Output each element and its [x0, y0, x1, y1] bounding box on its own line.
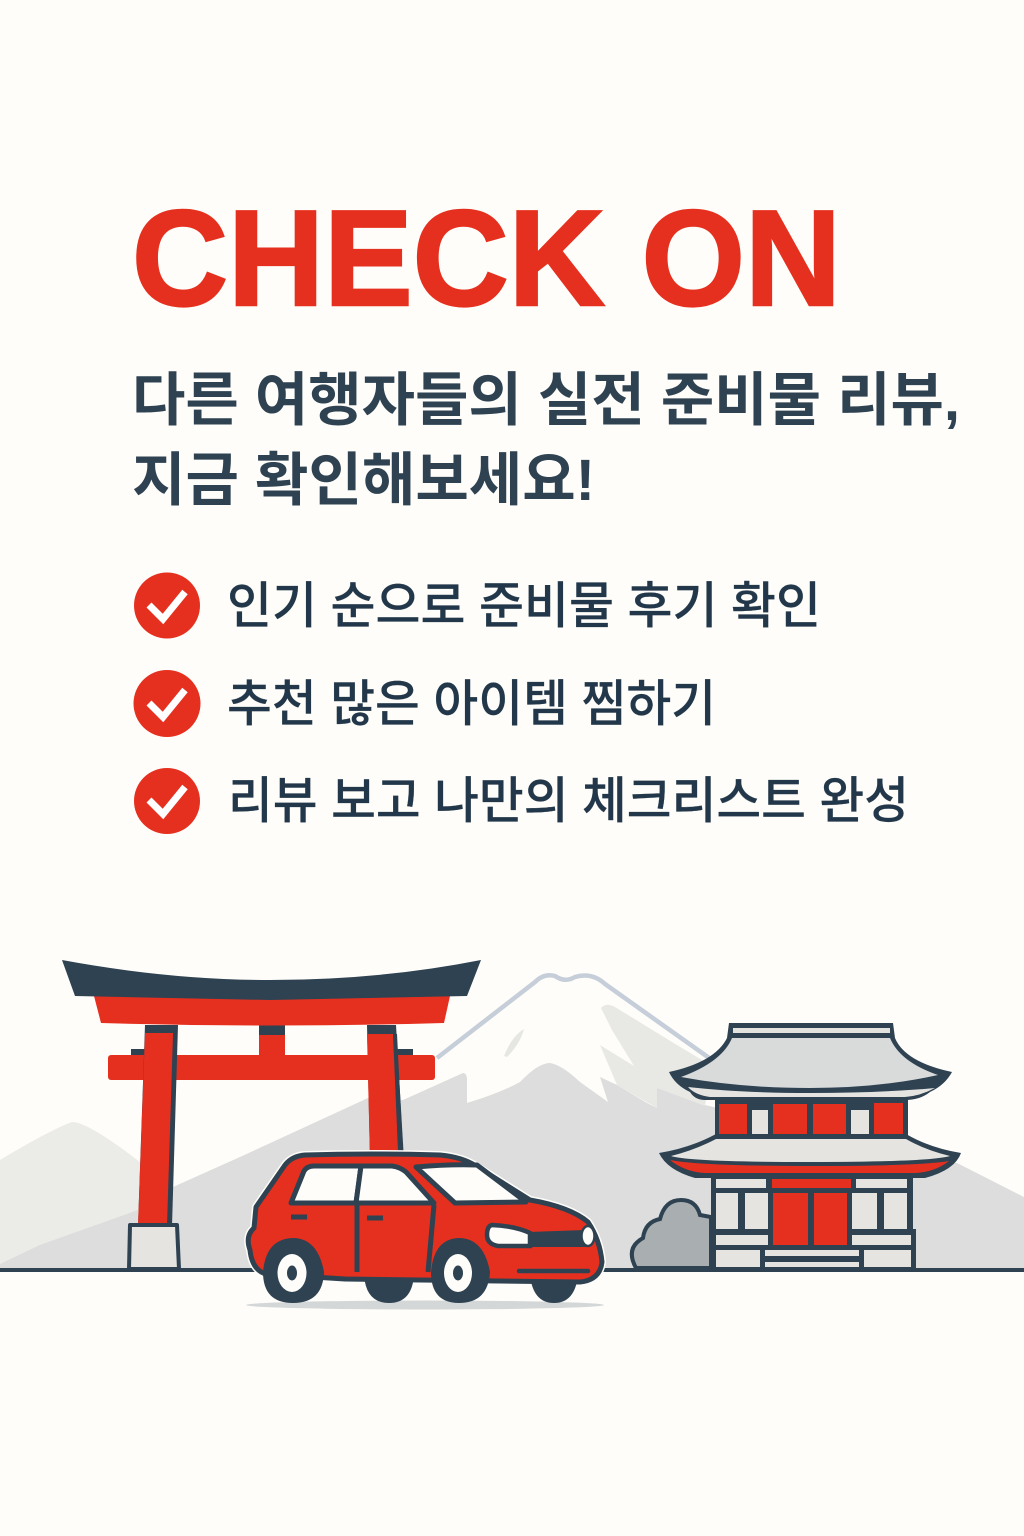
checklist — [134, 572, 909, 834]
main mountain — [0, 1063, 1024, 1270]
car side light — [582, 1226, 594, 1246]
car door handles — [291, 1217, 383, 1218]
car windows — [291, 1165, 526, 1203]
icon: red car — [248, 1154, 602, 1303]
left distant mountain — [0, 1122, 140, 1264]
car door lines — [357, 1203, 434, 1272]
title: CHECK ON — [132, 182, 841, 334]
car grille — [528, 1230, 586, 1247]
ground line — [0, 1268, 1024, 1272]
subtitle heading — [132, 368, 960, 513]
illustration: mountains — [0, 975, 1024, 1270]
front wheel — [431, 1238, 490, 1303]
torii right pillar overlay on beam — [393, 1034, 403, 1152]
torii right pillar — [367, 1025, 404, 1160]
torii end nubs — [131, 1049, 413, 1056]
snow cap highlight — [504, 1029, 524, 1057]
subtitle heading: 다른 여행자들의 실전 준비물 리뷰, — [132, 368, 960, 433]
torii roof — [62, 960, 481, 1000]
rear wheel — [263, 1238, 324, 1303]
checklist item 3: 리뷰 보고 나만의 체크리스트 완성 — [228, 773, 909, 829]
car headlight — [487, 1225, 530, 1246]
mountain ridge outline — [437, 975, 712, 1060]
icon: torii gate — [62, 960, 481, 1269]
icon: bush — [632, 1200, 711, 1268]
car bumper line — [519, 1269, 588, 1273]
torii center post — [259, 1024, 285, 1056]
temple upper roof — [669, 1023, 952, 1100]
temple ground floor — [711, 1172, 916, 1270]
torii left pillar — [138, 1025, 178, 1226]
temple upper storey — [715, 1098, 908, 1138]
torii base — [129, 1225, 179, 1269]
torii lintel — [94, 996, 450, 1026]
torii crossbeam — [108, 1055, 435, 1080]
car body — [248, 1154, 602, 1282]
checklist item 1: 인기 순으로 준비물 후기 확인 — [227, 578, 821, 634]
subtitle heading: 지금 확인해보세요! — [132, 448, 595, 513]
snow cap shading — [600, 1005, 712, 1108]
car under-body wheels — [364, 1275, 578, 1303]
temple lower roof — [659, 1134, 961, 1178]
checklist item 2 — [134, 670, 716, 737]
car halo — [248, 1154, 602, 1282]
checklist item 2: 추천 많은 아이템 찜하기 — [227, 676, 716, 732]
icon: temple — [659, 1023, 961, 1270]
car shadow — [246, 1300, 604, 1310]
